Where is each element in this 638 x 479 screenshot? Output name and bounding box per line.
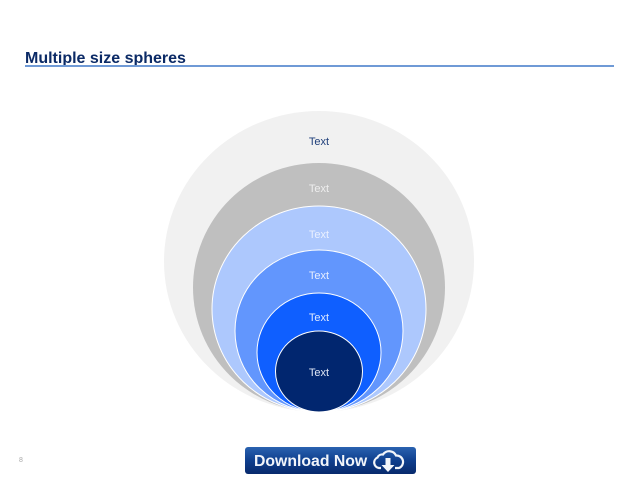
- page number: 8: [19, 457, 23, 464]
- button label: Download Now: [254, 453, 368, 470]
- sphere 3: pale blue: Text: [309, 229, 329, 241]
- sphere 6: navy core: [276, 331, 362, 412]
- sphere 6: navy core: Text: [309, 367, 329, 379]
- sphere 4: medium blue: [235, 250, 403, 412]
- sphere 2: grey: [193, 163, 445, 412]
- title underline: [25, 65, 614, 67]
- icon: cloud download: [374, 451, 403, 472]
- sphere 5: bright blue: [257, 293, 381, 412]
- sphere 1: outer light grey: Text: [309, 136, 329, 148]
- sphere 5: bright blue: Text: [309, 312, 329, 324]
- sphere 4: medium blue: Text: [309, 270, 329, 282]
- sphere 3: pale blue: [212, 206, 426, 412]
- title: Multiple size spheres: [25, 50, 186, 67]
- sphere 2: grey: Text: [309, 183, 329, 195]
